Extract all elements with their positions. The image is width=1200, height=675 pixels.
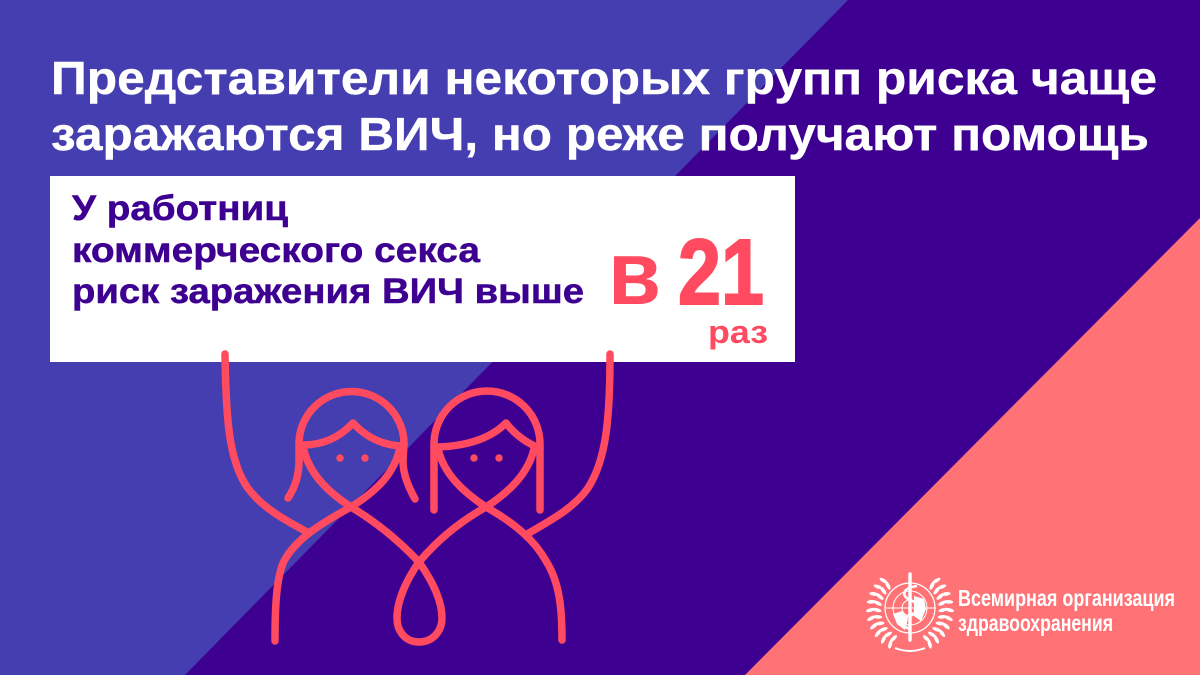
- left woman: face and body curve: [303, 447, 442, 642]
- left woman: right hair: [403, 444, 415, 499]
- right woman: head and straight hair: [434, 391, 540, 510]
- faces: eyes: [336, 454, 503, 462]
- big number: 21 times: 21: [678, 220, 764, 324]
- left woman: fringe: [303, 423, 401, 446]
- right woman: raised arm: [529, 354, 610, 533]
- illustration: two women holding the card: [225, 354, 610, 642]
- logo text: [958, 585, 1175, 636]
- right woman: face and body curve: [419, 449, 486, 562]
- title: Представители некоторых групп риска чаще: [51, 52, 1157, 104]
- left woman: left hair: [288, 444, 299, 498]
- logo text: здравоохранения: [958, 610, 1113, 636]
- card text: risk statement: риск заражения ВИЧ выше: [72, 272, 584, 311]
- card text: risk statement: коммерческого секса: [72, 231, 481, 270]
- right woman: fringe: [438, 423, 539, 448]
- card text: risk statement: У работниц: [72, 189, 289, 228]
- big number: 21 times: [608, 220, 768, 350]
- title: заражаются ВИЧ, но реже получают помощь: [51, 108, 1149, 160]
- card text: risk statement: [72, 189, 584, 311]
- left woman: head: [299, 392, 404, 444]
- big number: 21 times: в: [608, 224, 661, 324]
- WHO logo: [866, 574, 1175, 651]
- panel: white statistic card: [50, 176, 795, 362]
- title: [51, 52, 1157, 160]
- big number: 21 times: раз: [708, 314, 768, 350]
- icon: WHO emblem: [866, 574, 954, 651]
- left woman: raised arm: [225, 354, 309, 533]
